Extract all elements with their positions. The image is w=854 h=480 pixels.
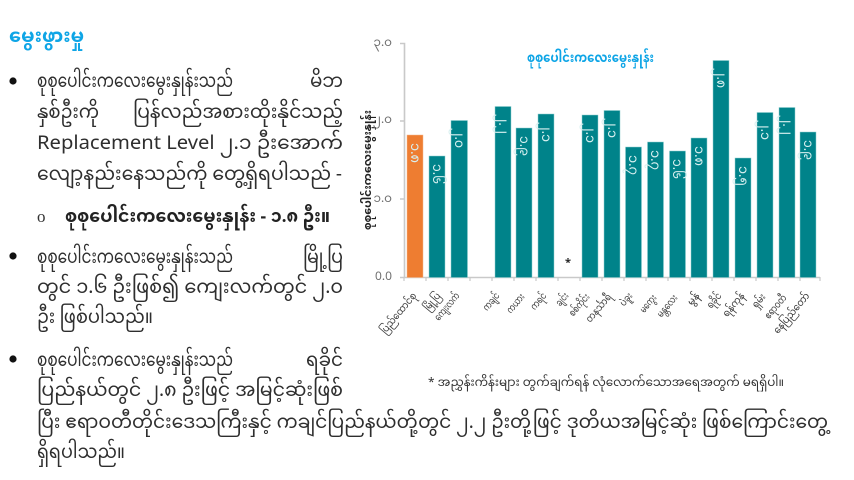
category labels: ရခိုင် — [701, 288, 729, 315]
missing value marker: * — [565, 252, 571, 276]
category labels: မွန် — [682, 287, 707, 312]
bar value labels: ၁.၆ — [660, 159, 691, 179]
text block: bullet 3 — [9, 342, 831, 475]
text block: bullet 1: Replacement Level ၂.၁ ဦးအောက် — [37, 125, 343, 166]
y axis: ၃.၀ — [374, 31, 392, 57]
bar value labels: ၂.၀ — [442, 128, 473, 148]
category labels: မြို့ပြ — [418, 287, 448, 317]
text block: bullet 1: နှစ်ဦးကို — [37, 94, 99, 135]
category labels: ကချင် — [477, 288, 507, 317]
bar value labels: ၂.၁ — [573, 123, 604, 143]
text block: total fertility rate sub-bullet: စုစုပေါင်းကလေးမွေးနှုန်း - ၁.၈ ဦး။ — [65, 199, 330, 238]
category labels — [375, 287, 817, 340]
bar value labels: ၁.၈ — [682, 146, 713, 166]
bars — [407, 60, 816, 278]
bar value labels: ၁.၈ — [398, 143, 429, 163]
text block: bullet 1: ပြန်လည်အစားထိုးနိုင်သည့် — [133, 94, 343, 135]
bar chart: total fertility rate by area — [358, 31, 822, 340]
y axis title: စုစုပေါင်းကလေးမွေးနှုန်း — [358, 110, 381, 230]
category labels: ကယား — [501, 289, 532, 320]
category labels: နေပြည်တော် — [768, 287, 817, 340]
footnote: * အညွှန်းကိန်းများ တွက်ချက်ရန် လုံလောက်သောအရေအတွက် မရရှိပါ။ — [428, 371, 784, 397]
text block: bullet 2: စုစုပေါင်းကလေးမွေးနှုန်းသည် — [37, 239, 233, 280]
bar value labels: ၁.၉ — [791, 140, 822, 160]
category labels: ရန်ကုန် — [717, 287, 752, 323]
text block: bullet 2: ဦး ဖြစ်ပါသည်။ — [37, 299, 153, 340]
category labels: စစ်ကိုင်း — [563, 289, 597, 323]
heading: မွေးဖွားမှု — [9, 18, 84, 59]
bar value labels: ၁.၉ — [507, 136, 538, 156]
text block: bullet 3: ပြည်နယ်တွင် ၂.၈ ဦးဖြင့် အမြင့်ဆုံးဖြစ် — [37, 372, 343, 413]
y axis: ၁.၀ — [373, 187, 392, 213]
category labels: ဧရာဝတီ — [759, 290, 794, 325]
text block: bullet 1: မိဘ — [310, 63, 343, 104]
text block: bullet 2: မြို့ပြ — [303, 239, 343, 280]
text block: bullet 1: လျော့နည်းနေသည်ကို တွေ့ရှိရပါသည် - — [37, 156, 342, 197]
category labels: ရှမ်း — [746, 289, 773, 314]
text block: bullet 3: ရခိုင် — [306, 342, 343, 383]
category labels: တနင်္သာရီ — [580, 288, 620, 329]
bar value labels: ၂.၂ — [770, 115, 801, 135]
chart title: စုစုပေါင်းကလေးမွေးနှုန်း — [527, 46, 654, 74]
bar value labels: ၁.၇ — [638, 150, 669, 170]
bar value labels: ၂.၁ — [595, 118, 626, 138]
category labels: ချင်း — [550, 288, 576, 313]
bar value labels: ၂.၈ — [704, 68, 735, 88]
bar value labels: ၂.၁ — [748, 120, 779, 140]
text block: bullet 2: တွင် ၁.၆ ဦးဖြစ်၍ ကျေးလက်တွင် ၂.၀ — [37, 269, 343, 310]
text block: bullet 3: ရှိရပါသည်။ — [37, 434, 125, 475]
bar value labels: ၁.၆ — [420, 164, 451, 184]
text block: bullet 1: စုစုပေါင်းကလေးမွေးနှုန်းသည် — [37, 63, 233, 104]
text block: bullet 3: စုစုပေါင်းကလေးမွေးနှုန်းသည် — [37, 342, 233, 383]
category labels: ပဲခူး — [614, 288, 640, 313]
y axis: 0.0 — [375, 265, 392, 291]
bar value labels: ၁.၅ — [726, 166, 757, 186]
bar value labels: ၂.၁ — [529, 122, 560, 142]
text block: total fertility rate sub-bullet: o — [37, 207, 46, 226]
bar value labels: ၂.၂ — [486, 114, 517, 134]
y axis: ၂.၀ — [373, 108, 392, 134]
bar value labels — [398, 68, 822, 186]
category labels: ကျေးလက် — [429, 288, 467, 327]
text block: bullet 2 — [9, 239, 343, 340]
category labels: ပြည်ထောင်စု — [375, 287, 424, 340]
category labels: ကရင် — [525, 288, 554, 316]
text block: bullet 3: ပြီး ဧရာဝတီတိုင်းဒေသကြီးနှင့် ကချင်ပြည်နယ်တို့တွင် ၂.၂ ဦးတို့ဖြင့် ဒုတိယအမြင့်ဆုံး ဖြစ်ကြောင်းတွေ့ — [37, 404, 831, 445]
category labels: မန္တလေး — [651, 290, 685, 324]
category labels: မကွေး — [634, 290, 664, 319]
text block: bullet 1 — [9, 63, 343, 197]
y axis — [373, 31, 820, 291]
bar value labels: ၁.၇ — [616, 155, 647, 175]
